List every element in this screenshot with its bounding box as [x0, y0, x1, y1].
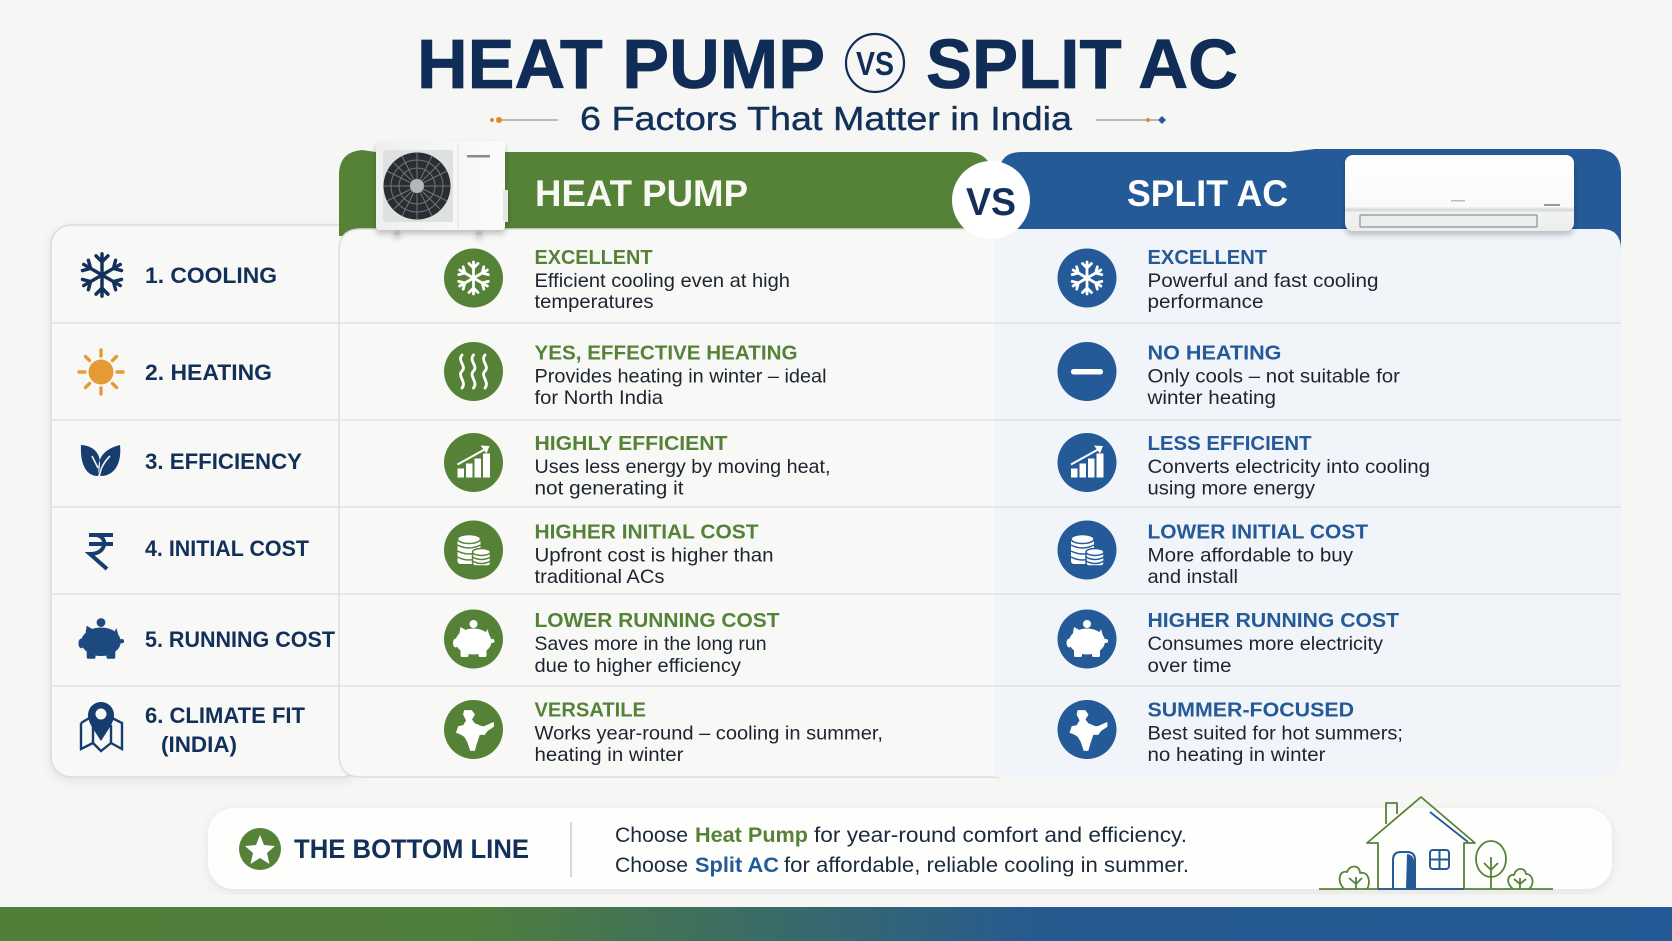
panel: split ac header	[1000, 149, 1621, 250]
panel: heat pump header	[339, 150, 992, 236]
heading: heat pump: HEAT PUMP	[535, 173, 748, 214]
row 4: initial cost label	[89, 535, 310, 569]
split ac: running cost: Consumes more electricity	[1148, 633, 1383, 655]
split ac: running cost	[1058, 609, 1399, 677]
subtitle	[490, 101, 1166, 138]
heat pump: cooling: EXCELLENT	[534, 246, 653, 269]
heat pump: heating	[444, 342, 826, 409]
heat pump: running cost: LOWER RUNNING COST	[534, 609, 780, 632]
summary text: Choose	[615, 854, 688, 877]
split ac: climate fit: Best suited for hot summers;	[1148, 722, 1403, 744]
title: VS	[856, 45, 894, 82]
title: SPLIT AC	[926, 25, 1238, 103]
row 6: climate fit label	[81, 702, 306, 757]
split ac: cooling: performance	[1148, 291, 1264, 313]
split ac: no heating: Only cools – not suitable for	[1148, 366, 1401, 388]
row 6: climate fit label: (INDIA)	[161, 732, 237, 757]
panel: split ac body	[994, 229, 1621, 777]
summary text	[615, 824, 1189, 877]
heat pump: efficiency: HIGHLY EFFICIENT	[534, 432, 728, 455]
heat pump: heating: YES, EFFECTIVE HEATING	[534, 342, 798, 364]
heat pump: climate fit	[444, 698, 883, 766]
split ac: no heating: winter heating	[1146, 387, 1276, 409]
row 1: cooling label	[81, 254, 277, 296]
row 2: heating label: 2. HEATING	[145, 360, 272, 385]
split ac: climate fit	[1058, 698, 1403, 766]
heat pump: efficiency	[444, 432, 830, 500]
vs badge	[952, 161, 1030, 239]
heat pump: running cost	[444, 609, 780, 677]
heat pump: running cost: Saves more in the long run	[534, 633, 766, 655]
split ac: efficiency	[1058, 432, 1430, 500]
row 4: initial cost label: 4. INITIAL COST	[145, 536, 310, 561]
panel: factors column	[51, 225, 361, 777]
heat pump: climate fit: heating in winter	[534, 744, 684, 766]
summary text: for affordable, reliable cooling in summer.	[784, 854, 1189, 877]
row 3: efficiency label	[81, 445, 302, 482]
row 3: efficiency label: 3. EFFICIENCY	[145, 449, 302, 474]
heat pump: cooling: Efficient cooling even at high	[534, 270, 790, 292]
row 5: running cost label	[78, 618, 336, 659]
split ac: running cost: over time	[1148, 655, 1232, 677]
panel: bottom line: THE BOTTOM LINE	[294, 834, 529, 864]
split ac: cooling	[1058, 246, 1378, 313]
row 5: running cost label: 5. RUNNING COST	[145, 627, 336, 652]
row 2: heating label	[79, 350, 272, 394]
panel: bottom line	[208, 808, 1612, 889]
split ac: initial cost: and install	[1148, 566, 1238, 588]
heat pump: climate fit: VERSATILE	[534, 698, 646, 722]
heat pump: initial cost: traditional ACs	[534, 566, 665, 588]
split ac: efficiency: using more energy	[1148, 478, 1315, 500]
summary text: Heat Pump	[695, 824, 808, 847]
title	[417, 25, 1238, 103]
split ac: cooling: EXCELLENT	[1148, 246, 1267, 269]
indoor split ac unit	[1345, 155, 1574, 231]
icon: house	[1319, 797, 1553, 889]
heat pump: initial cost	[444, 520, 774, 588]
split ac: cooling: Powerful and fast cooling	[1148, 270, 1378, 292]
heat pump: running cost: due to higher efficiency	[534, 655, 741, 677]
heat pump: initial cost: Upfront cost is higher than	[534, 544, 774, 566]
summary text: for year-round comfort and efficiency.	[814, 824, 1187, 847]
heat pump: climate fit: Works year-round – cooling in summer,	[534, 722, 883, 744]
summary text: Split AC	[695, 854, 779, 877]
summary text: Choose	[615, 824, 688, 847]
split ac: climate fit: no heating in winter	[1148, 744, 1326, 766]
split ac: efficiency: LESS EFFICIENT	[1148, 432, 1312, 455]
heat pump: initial cost: HIGHER INITIAL COST	[534, 520, 759, 544]
split ac: no heating	[1058, 342, 1401, 409]
vs badge: VS	[966, 181, 1016, 224]
heat pump: efficiency: Uses less energy by moving heat,	[534, 456, 830, 478]
icon: star	[239, 828, 281, 870]
heat pump: efficiency: not generating it	[534, 478, 684, 500]
split ac: initial cost	[1058, 520, 1368, 588]
heat pump: heating: for North India	[534, 387, 663, 409]
heat pump: cooling	[444, 246, 790, 313]
row 1: cooling label: 1. COOLING	[145, 263, 277, 288]
outdoor heat pump unit	[376, 141, 508, 235]
split ac: running cost: HIGHER RUNNING COST	[1148, 609, 1399, 632]
heat pump: heating: Provides heating in winter – ideal	[534, 366, 826, 388]
split ac: efficiency: Converts electricity into cooling	[1148, 456, 1430, 478]
row dividers	[51, 323, 1621, 686]
split ac: initial cost: LOWER INITIAL COST	[1148, 520, 1368, 544]
split ac: no heating: NO HEATING	[1148, 342, 1282, 364]
subtitle: 6 Factors That Matter in India	[580, 101, 1072, 138]
bottom band	[0, 907, 1672, 941]
row 6: climate fit label: 6. CLIMATE FIT	[145, 703, 306, 728]
panel: heat pump body	[339, 229, 1000, 777]
split ac: initial cost: More affordable to buy	[1148, 544, 1353, 566]
heat pump: cooling: temperatures	[534, 291, 654, 313]
split ac: climate fit: SUMMER-FOCUSED	[1148, 698, 1354, 722]
title: HEAT PUMP	[417, 25, 825, 103]
heading: split ac: SPLIT AC	[1127, 173, 1288, 214]
